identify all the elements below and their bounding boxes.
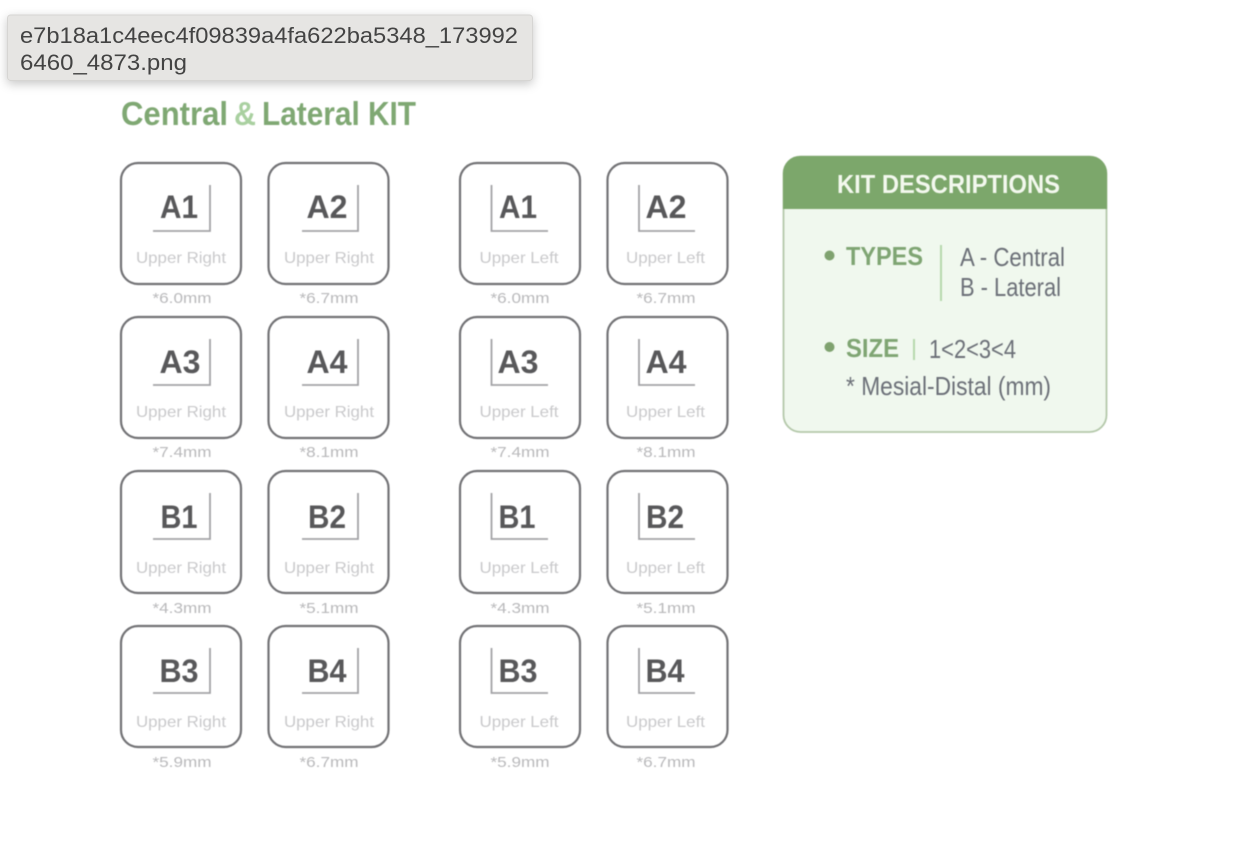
card: B3 upper right: B3 xyxy=(160,653,198,689)
card: A4 upper left: *8.1mm xyxy=(636,444,696,461)
card: A1 upper left: *6.0mm xyxy=(490,290,550,307)
panel: upper right kits xyxy=(121,163,388,771)
card: B1 upper left: B1 xyxy=(498,499,536,535)
card: B2 upper left: B2 xyxy=(646,499,684,535)
card: A4 upper left: Upper Left xyxy=(626,404,706,421)
card: B2 upper left: Upper Left xyxy=(626,560,706,577)
card: B3 upper right: *5.9mm xyxy=(152,754,212,771)
card: B1 upper right: *4.3mm xyxy=(152,600,212,617)
title: & xyxy=(234,95,256,132)
tooltip: file name: 6460_4873.png xyxy=(20,50,187,75)
card: A2 upper right: Upper Right xyxy=(284,250,375,267)
card: A1 upper right xyxy=(121,163,241,307)
panel: upper left kits xyxy=(460,163,728,771)
card: B1 upper left xyxy=(460,471,580,617)
card: A4 upper left: A4 xyxy=(646,344,687,380)
card: B3 upper right xyxy=(121,626,241,771)
card: A2 upper right xyxy=(268,163,388,307)
card: B2 upper right: Upper Right xyxy=(284,560,375,577)
card: A4 upper right: A4 xyxy=(306,344,348,380)
text block: types: TYPES xyxy=(846,241,923,271)
card: B1 upper left: Upper Left xyxy=(480,560,559,577)
card: A1 upper left: Upper Left xyxy=(480,250,559,267)
card: A4 upper right: *8.1mm xyxy=(300,444,358,461)
card: A2 upper right: *6.7mm xyxy=(300,290,358,307)
card: A2 upper left: Upper Left xyxy=(626,250,706,267)
card: A2 upper left: *6.7mm xyxy=(636,290,696,307)
card: A3 upper left: *7.4mm xyxy=(490,444,550,461)
text block: types: A - Central xyxy=(960,242,1065,272)
card: A2 upper left xyxy=(608,163,728,307)
text block: size: * Mesial-Distal (mm) xyxy=(846,371,1051,401)
card: B4 upper right: *6.7mm xyxy=(300,754,358,771)
card: A1 upper right: A1 xyxy=(160,189,198,225)
card: A4 upper left xyxy=(608,317,728,461)
card: B2 upper right: B2 xyxy=(308,499,346,535)
card: A3 upper left xyxy=(460,317,580,461)
card: A1 upper left xyxy=(460,163,580,307)
card: A2 upper right: A2 xyxy=(306,189,348,225)
card: B4 upper left xyxy=(608,626,728,771)
card: A2 upper left: A2 xyxy=(646,189,686,225)
card: A3 upper right: Upper Right xyxy=(136,404,227,421)
card: B2 upper right: *5.1mm xyxy=(300,600,358,617)
text block: size xyxy=(824,333,1051,401)
card: A3 upper right: *7.4mm xyxy=(152,444,212,461)
card: B4 upper left: B4 xyxy=(646,653,685,689)
card: B4 upper left: Upper Left xyxy=(626,714,706,731)
card: B1 upper left: *4.3mm xyxy=(490,600,550,617)
card: A4 upper right: Upper Right xyxy=(284,404,375,421)
card: B2 upper left xyxy=(608,471,728,617)
card: A1 upper left: A1 xyxy=(499,189,537,225)
card: B3 upper left: Upper Left xyxy=(480,714,559,731)
card: B4 upper right xyxy=(268,626,388,771)
text block: types xyxy=(824,241,1065,302)
card: A3 upper right: A3 xyxy=(160,344,200,380)
card: B4 upper right: B4 xyxy=(308,653,347,689)
card: B1 upper right xyxy=(121,471,241,617)
text block: size: SIZE xyxy=(846,333,899,363)
card: B1 upper right: B1 xyxy=(160,499,198,535)
card: B3 upper left: *5.9mm xyxy=(490,754,550,771)
card: B1 upper right: Upper Right xyxy=(136,560,227,577)
card: A4 upper right xyxy=(268,317,388,461)
title: Lateral KIT xyxy=(262,95,416,132)
card: B2 upper left: *5.1mm xyxy=(636,600,696,617)
card: B4 upper right: Upper Right xyxy=(284,714,375,731)
text block: size: 1<2<3<4 xyxy=(929,334,1016,364)
card: B4 upper left: *6.7mm xyxy=(636,754,696,771)
heading: kit descriptions: KIT DESCRIPTIONS xyxy=(837,169,1060,199)
title: Central xyxy=(121,95,228,132)
card: B2 upper right xyxy=(268,471,388,617)
card: A3 upper left: A3 xyxy=(498,344,538,380)
tooltip: file name xyxy=(8,15,532,80)
card: B3 upper right: Upper Right xyxy=(136,714,227,731)
panel: kit descriptions xyxy=(783,156,1107,432)
title xyxy=(121,95,416,132)
tooltip: file name: e7b18a1c4eec4f09839a4fa622ba5348_173992 xyxy=(20,23,518,48)
card: B3 upper left xyxy=(460,626,580,771)
text block: types: B - Lateral xyxy=(960,272,1061,302)
card: A1 upper right: Upper Right xyxy=(136,250,227,267)
card: B3 upper left: B3 xyxy=(498,653,538,689)
card: A1 upper right: *6.0mm xyxy=(152,290,212,307)
card: A3 upper left: Upper Left xyxy=(480,404,559,421)
card: A3 upper right xyxy=(121,317,241,461)
